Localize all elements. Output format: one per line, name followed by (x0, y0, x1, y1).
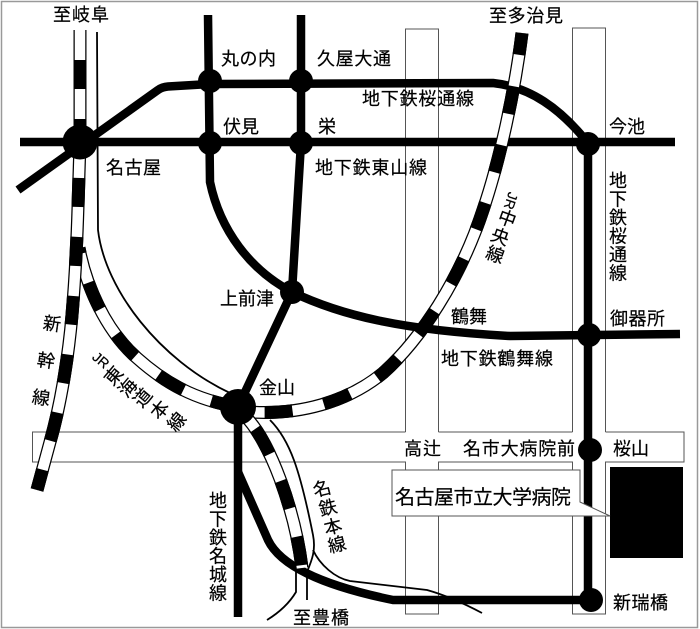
thin railway lines (97, 32, 482, 620)
label: Kanayama: 金山 (259, 378, 295, 398)
label: JR Tokaido main line: 東 (101, 363, 127, 389)
label: JR Tokaido main line (89, 348, 190, 435)
label: Meitetsu main line: 線 (326, 533, 348, 557)
label: JR Tokaido main line: JR (89, 348, 113, 372)
label: JR Chuo line: JR (501, 190, 521, 212)
label: Meitetsu main line: 本 (322, 515, 344, 539)
label: Higashiyama line: 地下鉄東山線 (315, 158, 427, 178)
railway: Shinkansen (37, 30, 80, 490)
label: JR Tokaido main line: 線 (164, 409, 190, 435)
Meijo branch (238, 472, 590, 600)
label: Takatsuji: 高辻 (404, 439, 441, 459)
label: Meitetsu main line (311, 477, 348, 557)
label: JR Tokaido main line: 道 (130, 385, 156, 411)
label: Nagoya City University Hospital-mae: 名市大病院前 (463, 439, 575, 459)
Higashiyama line horizontal (20, 138, 675, 146)
label: Shinkansen: 幹 (36, 350, 56, 372)
label: Sakura-dori line vertical: 地下鉄桜通線 (609, 171, 627, 284)
label: Gokiso: 御器所 (610, 309, 665, 329)
label: Marunouchi: 丸の内 (221, 49, 276, 69)
label: Tsurumai: 鶴舞 (451, 307, 487, 327)
label: Sakae: 栄 (318, 117, 336, 137)
label: Aratamabashi: 新瑞橋 (613, 593, 668, 613)
Higashiyama line vertical (238, 15, 301, 407)
callout: hospital name: 名古屋市立大学病院 (395, 486, 571, 509)
railway: Meitetsu line (244, 415, 302, 568)
label: Meitetsu main line: 鉄 (317, 496, 339, 520)
label: JR Chuo line: 央 (488, 225, 512, 249)
station markers (62, 69, 603, 612)
label: Shinkansen: 新 (42, 313, 62, 335)
label: Shinkansen (31, 313, 62, 409)
railway: Tokaido line (79, 248, 238, 407)
label: Imaike: 今池 (609, 117, 645, 137)
label: Hisaya-odori: 久屋大通 (317, 49, 391, 69)
label: to Gifu: 至岐阜 (53, 5, 109, 25)
label: JR Chuo line: 中 (495, 207, 519, 231)
Sakura-dori line (18, 83, 588, 602)
Meijo line (234, 407, 242, 617)
hospital block (610, 467, 683, 558)
label: Meijo line: 地下鉄名城線 (209, 491, 227, 604)
label: Kamimaezu: 上前津 (220, 289, 274, 309)
label: to Toyohashi: 至豊橋 (293, 608, 349, 628)
label: to Tajimi: 至多治見 (489, 6, 563, 26)
label: Nagoya: 名古屋 (106, 158, 161, 178)
label: JR Tokaido main line: 本 (147, 397, 173, 423)
label: JR Tokaido main line: 海 (115, 375, 141, 401)
label: Meitetsu main line: 名 (311, 477, 333, 501)
label: Shinkansen: 線 (31, 387, 51, 409)
label: Fushimi: 伏見 (223, 117, 259, 137)
Tsurumai line (208, 15, 680, 336)
label: Sakurayama: 桜山 (613, 439, 649, 459)
label: JR Chuo line (483, 190, 521, 267)
callout: hospital name (392, 470, 610, 516)
label: Tsurumai line: 地下鉄鶴舞線 (441, 349, 553, 369)
railway: Chuo line (238, 33, 522, 413)
label: JR Chuo line: 線 (483, 243, 507, 267)
label: Sakura-dori line: 地下鉄桜通線 (362, 89, 474, 109)
